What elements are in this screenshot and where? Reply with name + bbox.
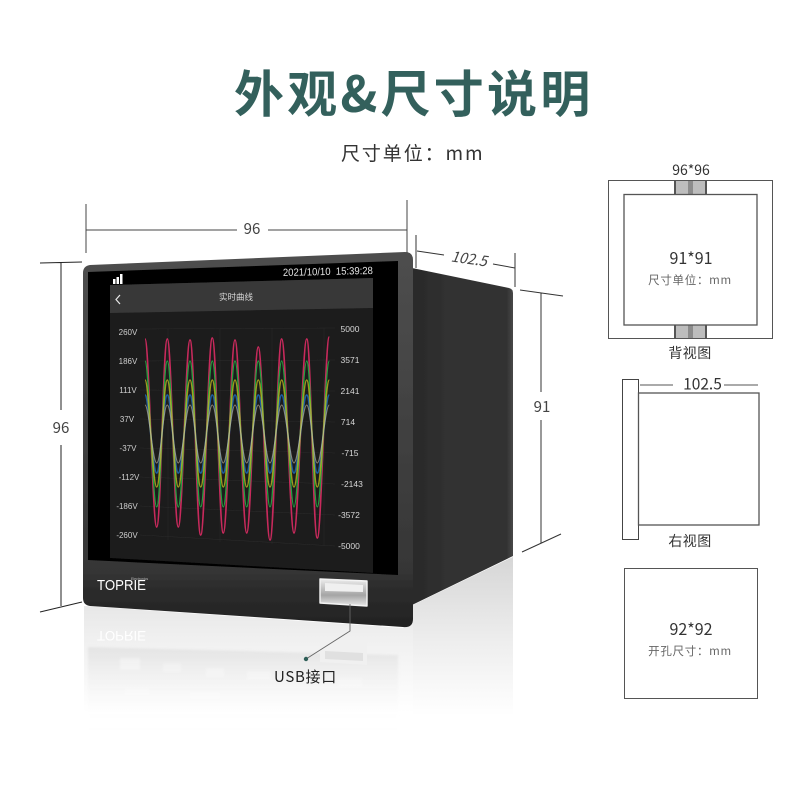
- left axis labels: 111V: [119, 386, 137, 395]
- dimension: depth 102.5: 102.5: [450, 246, 490, 272]
- top clip: [674, 181, 707, 194]
- brand logo: Electronics: [131, 577, 148, 581]
- panel: rear view: [608, 160, 772, 363]
- dimension: rear height 91: [520, 290, 563, 552]
- dimension: rear height 91: 91: [534, 396, 550, 417]
- right axis labels: 3571: [341, 355, 360, 365]
- cutout size: 92*92: [670, 616, 713, 640]
- dimension: front width 96: 96: [244, 218, 260, 239]
- device side housing: [412, 268, 513, 605]
- left axis labels: -260V: [116, 531, 138, 540]
- right axis labels: 2141: [341, 386, 360, 396]
- right view depth dimension: 102.5: [683, 372, 722, 394]
- floor reflection of the device: TOPRIE: [97, 628, 146, 644]
- rear cut size: 91*91: [670, 245, 712, 269]
- panel: right view: [622, 372, 759, 551]
- dimension: front width 96: [86, 200, 407, 253]
- signal icon: [113, 274, 122, 284]
- left axis labels: 37V: [120, 415, 135, 424]
- USB port: [320, 579, 367, 606]
- screen header band: [110, 278, 373, 313]
- back chevron: [116, 295, 120, 304]
- right axis labels: [338, 324, 363, 551]
- screen heading: 实时曲线: [219, 291, 253, 303]
- waveforms: [145, 337, 329, 540]
- device front bezel: [83, 252, 413, 627]
- right axis labels: -3572: [338, 510, 360, 520]
- panel: cutout size: [624, 568, 758, 698]
- bottom clip: [674, 325, 707, 338]
- screen chart panel: [110, 278, 373, 573]
- floor reflection of the device: [84, 557, 513, 730]
- right axis labels: -715: [341, 448, 359, 458]
- cutout note: 开孔尺寸：mm: [648, 643, 732, 659]
- left axis labels: [116, 328, 140, 540]
- right axis labels: 5000: [341, 324, 360, 334]
- USB label: USB接口: [274, 666, 337, 687]
- right view caption: 右视图: [668, 531, 712, 551]
- rear unit note: 尺寸单位：mm: [648, 272, 732, 288]
- left axis labels: -186V: [116, 502, 138, 511]
- right axis labels: -2143: [341, 479, 363, 489]
- date and time: 2021/10/10 15:39:28: [283, 265, 373, 279]
- right axis labels: 714: [341, 417, 355, 427]
- left axis labels: -112V: [119, 473, 140, 482]
- left axis labels: -37V: [120, 444, 137, 453]
- chart grid: [140, 328, 335, 546]
- dimension: front height 96: 96: [53, 417, 69, 438]
- dimension: depth 102.5: [416, 235, 515, 287]
- rear view size label: 96*96: [672, 160, 710, 180]
- dimension: front height 96: [40, 262, 82, 612]
- rear view caption: 背视图: [668, 343, 712, 363]
- USB leader line: [304, 604, 350, 661]
- left axis labels: 260V: [119, 328, 138, 337]
- right axis labels: -5000: [338, 541, 360, 551]
- left axis labels: 186V: [119, 357, 138, 366]
- subtitle: unit of measure: 尺寸单位：mm: [341, 139, 484, 166]
- right view depth dimension: [640, 372, 758, 394]
- title: 外观&尺寸说明: [234, 55, 593, 127]
- brand logo: TOPRIE: [97, 578, 146, 594]
- black screen: [88, 261, 398, 575]
